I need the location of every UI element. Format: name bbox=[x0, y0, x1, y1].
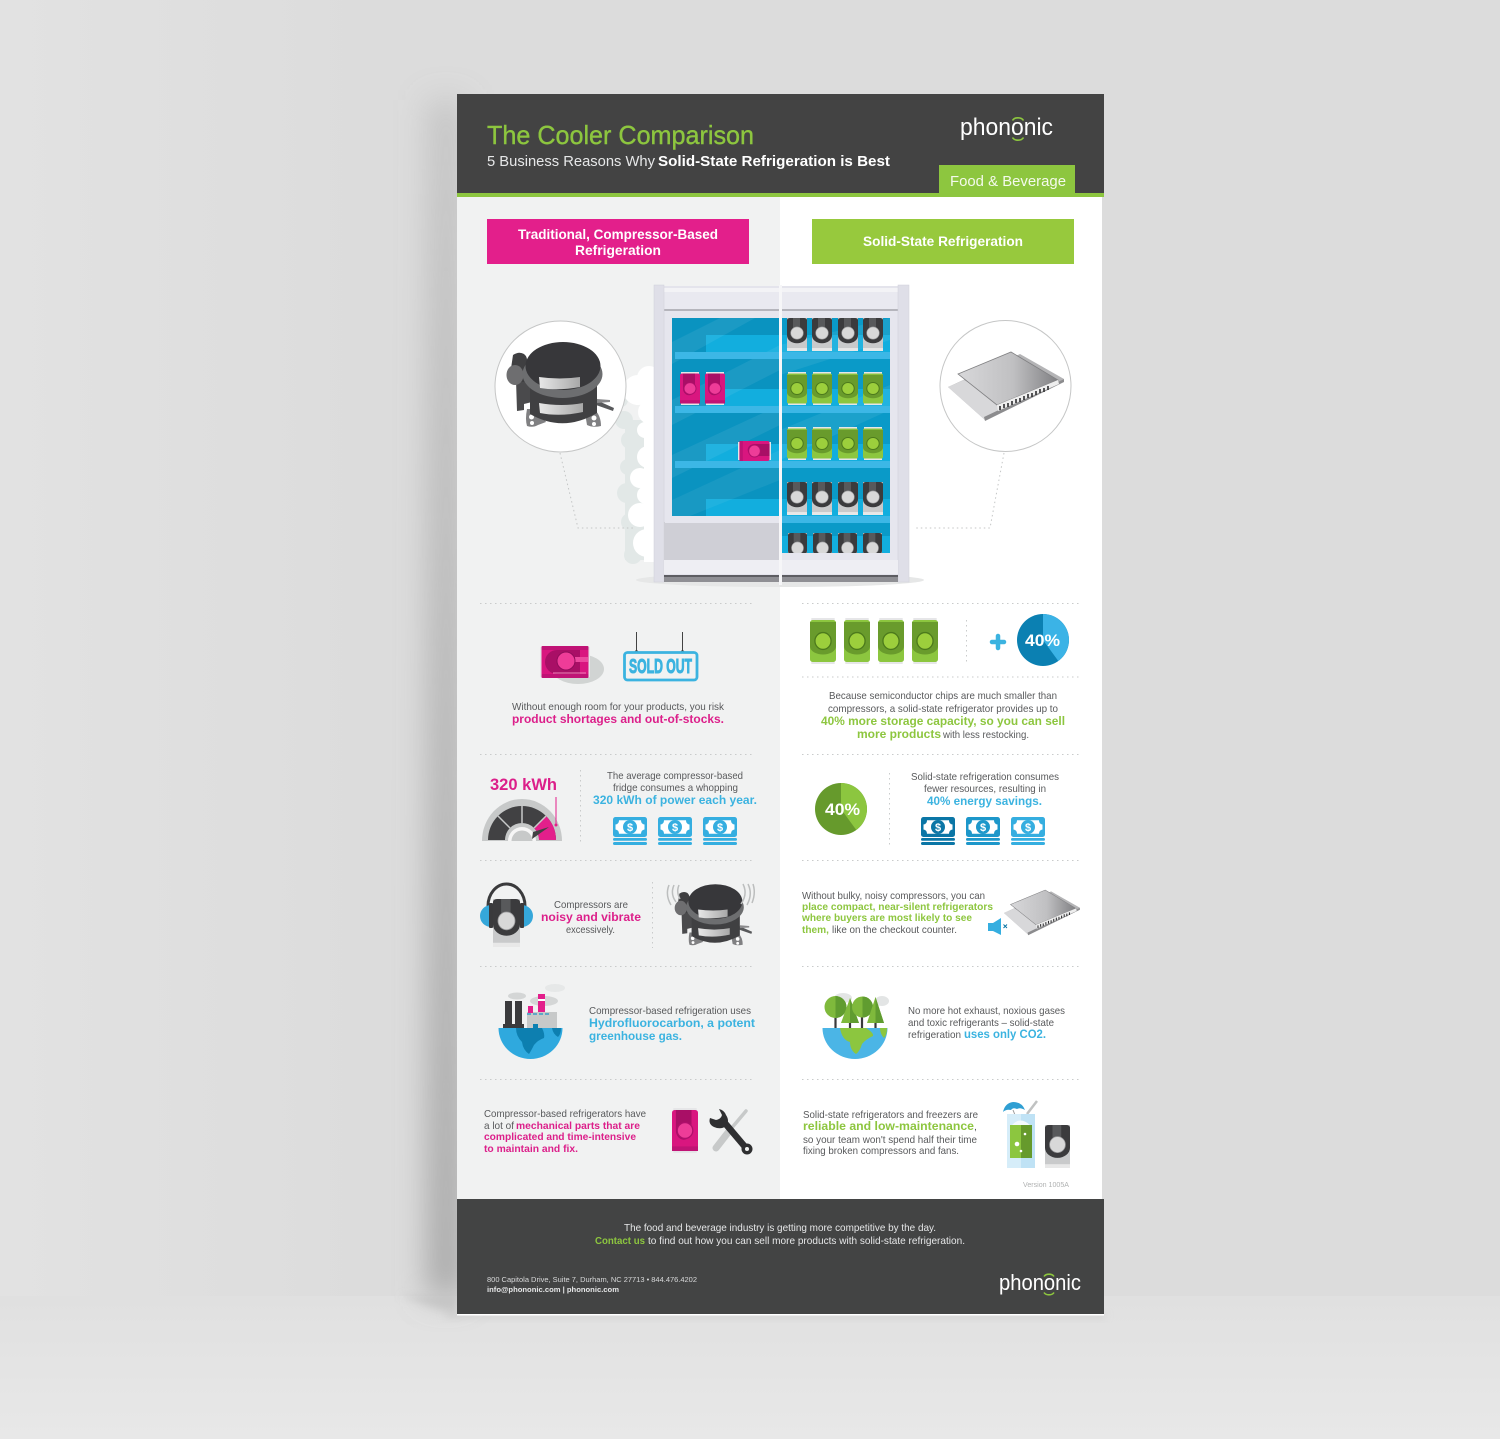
text: energy use: The average compressor-based bbox=[607, 770, 743, 782]
text: shortages bbox=[512, 701, 725, 726]
stat: 320 kWh: 320 kWh bbox=[490, 775, 557, 794]
fridge interior: blue glass bbox=[672, 318, 890, 554]
text: storage capacity: with less restocking. bbox=[942, 729, 1029, 741]
text: shortages: product shortages and out-of-stocks. bbox=[512, 714, 724, 726]
icon: muted speaker bbox=[988, 918, 1007, 935]
chart: 40 percent blue pie: 40% bbox=[1025, 631, 1060, 650]
row 1 left: shortages bbox=[512, 632, 725, 726]
row 2 left: energy use bbox=[482, 770, 757, 845]
text: storage capacity: 40% more storage capacity, so you can sell bbox=[821, 716, 1065, 728]
footer band bbox=[457, 1199, 1104, 1314]
icon: plus sign bbox=[992, 636, 1004, 648]
text: clean gas: and toxic refrigerants – solid-state bbox=[908, 1017, 1054, 1029]
row 5 right: reliability bbox=[803, 1101, 1070, 1189]
footer contact details: info@phononic.com | phononic.com bbox=[487, 1285, 619, 1294]
text: clean gas: refrigeration bbox=[908, 1029, 961, 1041]
heading: traditional refrigeration bbox=[487, 219, 749, 264]
text: maintenance: to maintain and fix. bbox=[484, 1143, 578, 1155]
text: energy savings: Solid-state refrigeration consumes bbox=[911, 771, 1059, 783]
title: The Cooler Comparison bbox=[487, 120, 754, 150]
text: maintenance: complicated and time-intensive bbox=[484, 1131, 636, 1143]
text: maintenance: a lot of bbox=[484, 1120, 514, 1132]
fridge inner frame bbox=[665, 311, 897, 560]
heading: solid-state refrigeration: Solid-State Refrigeration bbox=[863, 234, 1023, 249]
heading: traditional refrigeration: Traditional, Compressor-Based bbox=[518, 227, 718, 242]
logo: phononic header: phononic bbox=[960, 114, 1053, 141]
icon: sideways pink can with shadow bbox=[540, 646, 604, 684]
text: clean gas: No more hot exhaust, noxious gases bbox=[908, 1005, 1065, 1017]
chart: gauge bbox=[482, 797, 562, 841]
text: energy use: 320 kWh of power each year. bbox=[593, 795, 757, 807]
icon: can with headphones bbox=[480, 884, 533, 947]
text: maintenance bbox=[484, 1108, 646, 1155]
icon: four green cans bbox=[810, 618, 938, 664]
row 3 left: noise bbox=[480, 884, 754, 947]
callout: compressor circle bbox=[495, 321, 635, 528]
row 4 right: clean gas bbox=[822, 993, 1065, 1059]
cans: left shelves bbox=[680, 372, 771, 461]
text: reliability: Solid-state refrigerators and freezers are bbox=[803, 1109, 978, 1121]
text: maintenance: mechanical parts that are bbox=[516, 1120, 640, 1132]
text: storage capacity: compressors, a solid-state refrigerator provides up to bbox=[828, 703, 1058, 715]
text: greenhouse gas: Compressor-based refrigeration uses bbox=[589, 1005, 751, 1017]
header band bbox=[457, 94, 1104, 197]
text: energy savings: fewer resources, resulting in bbox=[924, 783, 1046, 795]
text: noise: noisy and vibrate bbox=[541, 912, 641, 924]
text: quiet placement: where buyers are most likely to see bbox=[801, 912, 972, 924]
subtitle bbox=[487, 153, 890, 170]
panel: left column background bbox=[457, 195, 780, 1201]
text: clean gas bbox=[908, 1005, 1065, 1041]
row 1 right: storage bbox=[810, 614, 1069, 741]
icon: sold out sign bbox=[624, 632, 697, 680]
poster bbox=[457, 94, 1104, 1316]
text: quiet placement: Without bulky, noisy compressors, you can bbox=[802, 890, 985, 902]
tag: food and beverage bbox=[939, 165, 1075, 195]
footer message: to find out how you can sell more products with solid-state refrigeration. bbox=[648, 1235, 965, 1247]
icon: pink can bbox=[672, 1108, 698, 1153]
heading: traditional refrigeration: Refrigeration bbox=[575, 243, 661, 258]
text: storage capacity: more products bbox=[857, 729, 941, 741]
text: energy use bbox=[593, 770, 757, 807]
text: energy savings: 40% energy savings. bbox=[927, 796, 1042, 808]
icon: three money stacks shaded bbox=[921, 817, 1045, 845]
text: reliability: fixing broken compressors and fans. bbox=[803, 1145, 959, 1157]
text: quiet placement: them, bbox=[802, 924, 829, 936]
text: greenhouse gas bbox=[589, 1005, 755, 1043]
icon: factory on globe bbox=[498, 984, 565, 1059]
text: greenhouse gas: Hydrofluorocarbon, a potent bbox=[589, 1018, 755, 1030]
icon: three money stacks bbox=[613, 817, 737, 845]
tag: food and beverage: Food & Beverage bbox=[950, 173, 1066, 190]
text: reliability: , bbox=[974, 1121, 977, 1133]
icon: dark can bbox=[1045, 1125, 1070, 1168]
text: quiet placement: like on the checkout counter. bbox=[832, 924, 957, 936]
row 4 left: greenhouse gas bbox=[498, 984, 755, 1059]
text: shortages: Without enough room for your products, you risk bbox=[512, 701, 725, 713]
text: reliability bbox=[803, 1109, 978, 1157]
cans: right shelves bbox=[780, 318, 898, 574]
text: energy use: fridge consumes a whopping bbox=[613, 782, 738, 794]
footer message: The food and beverage industry is getting more competitive by the day. bbox=[624, 1222, 936, 1234]
steam clouds bbox=[611, 366, 662, 564]
text: noise: Compressors are bbox=[554, 899, 628, 911]
panel: right column background bbox=[780, 195, 1102, 1201]
heading: solid-state refrigeration bbox=[812, 219, 1074, 264]
footer contact details bbox=[487, 1275, 697, 1294]
text: greenhouse gas: greenhouse gas. bbox=[589, 1031, 682, 1043]
chart: 40 percent blue pie bbox=[1017, 614, 1069, 666]
subtitle: Solid-State Refrigeration is Best bbox=[658, 153, 890, 170]
text: storage capacity bbox=[821, 690, 1065, 741]
footer message: Contact us bbox=[595, 1235, 645, 1247]
footer contact details: 800 Capitola Drive, Suite 7, Durham, NC 27713 • 844.476.4202 bbox=[487, 1275, 697, 1284]
text: reliability: so your team won't spend half their time bbox=[803, 1134, 977, 1146]
chart: 40 percent green pie bbox=[815, 783, 867, 835]
text: reliability: reliable and low-maintenance bbox=[803, 1121, 974, 1133]
icon: trees on globe bbox=[822, 993, 889, 1059]
row 2 right: energy savings bbox=[815, 771, 1059, 845]
logo: phononic footer: phononic bbox=[999, 1270, 1081, 1295]
row 5 left: maintenance bbox=[484, 1108, 752, 1155]
text: energy savings bbox=[911, 771, 1059, 808]
icon: sold out sign: SOLD OUT bbox=[629, 656, 692, 678]
text: quiet placement bbox=[801, 890, 993, 936]
footer message bbox=[595, 1222, 965, 1247]
text: noise: excessively. bbox=[566, 924, 615, 936]
version note: Version 1005A bbox=[1023, 1182, 1069, 1189]
icon: small chip bbox=[1004, 890, 1080, 935]
icon: drink with umbrella bbox=[1003, 1101, 1037, 1168]
text: maintenance: Compressor-based refrigerators have bbox=[484, 1108, 646, 1120]
callout: solid-state chip circle bbox=[916, 320, 1071, 528]
fridge illustration bbox=[636, 285, 924, 587]
icon: screwdriver and wrench bbox=[710, 1109, 752, 1154]
text: storage capacity: Because semiconductor chips are much smaller than bbox=[829, 690, 1057, 702]
subtitle: 5 Business Reasons Why bbox=[487, 153, 655, 170]
text: clean gas: uses only CO2. bbox=[964, 1029, 1046, 1041]
chart: 40 percent green pie: 40% bbox=[825, 800, 860, 819]
icon: vibrating compressor bbox=[667, 884, 754, 945]
text: noise bbox=[541, 899, 641, 936]
row 3 right: quiet placement bbox=[801, 890, 1080, 936]
text: quiet placement: place compact, near-silent refrigerators bbox=[802, 901, 993, 913]
